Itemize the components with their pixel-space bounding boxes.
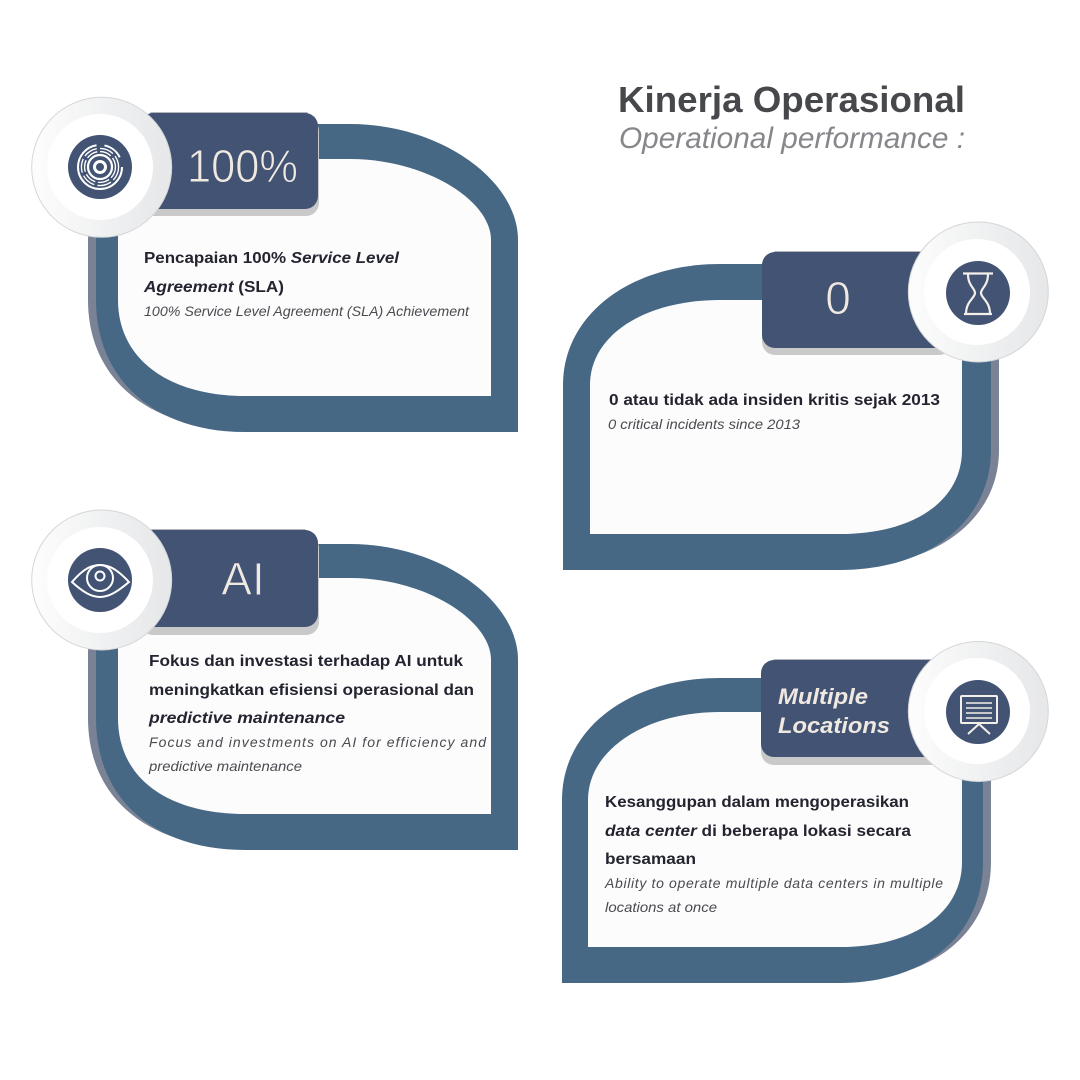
text block: AI (148, 653, 487, 774)
icon: presentation board (908, 642, 1048, 782)
text block: incidents (608, 392, 940, 432)
title: Kinerja Operasional (618, 79, 965, 120)
icon: gear wheel (32, 97, 172, 237)
text block: incidents: 0 atau tidak ada insiden kritis sejak 2013 (609, 392, 940, 409)
panel: 100% SLA (32, 97, 518, 432)
text block: AI: Fokus dan investasi terhadap AI untuk (149, 653, 463, 670)
text block: locations: Kesanggupan dalam mengoperasikan (605, 794, 909, 811)
text block: SLA: Agreement (SLA) (143, 279, 284, 296)
badge: 0: 0 (825, 272, 851, 324)
badge: 100% (140, 112, 319, 216)
badge: AI: AI (221, 553, 265, 605)
text block: locations: bersamaan (605, 851, 696, 868)
badge: 100%: 100% (187, 140, 298, 192)
panel: Multiple Locations (562, 642, 1048, 983)
icon: eye (32, 510, 172, 650)
icon: hourglass (908, 222, 1048, 362)
text block: incidents: 0 critical incidents since 2013 (608, 416, 800, 432)
text block: SLA: 100% Service Level Agreement (SLA) Achievement (144, 303, 470, 319)
badge: Multiple Locations: Multiple (778, 684, 868, 709)
text block: locations (604, 794, 943, 915)
badge: 0 (762, 251, 952, 355)
title (618, 79, 965, 155)
text block: locations: locations at once (605, 899, 717, 915)
text block: locations: Ability to operate multiple data centers in multiple (604, 875, 943, 891)
text block: AI: meningkatkan efisiensi operasional dan (149, 682, 474, 699)
text block: AI: predictive maintenance (148, 758, 302, 774)
text block: SLA: Pencapaian 100% Service Level (144, 250, 400, 267)
panel: 0 incidents (563, 222, 1048, 570)
text block: AI: Focus and investments on AI for efficiency and (149, 734, 487, 750)
text block: AI: predictive maintenance (148, 710, 345, 727)
text block: locations: data center di beberapa lokasi secara (605, 823, 911, 840)
badge: Multiple Locations: Locations (778, 713, 890, 738)
title: Operational performance : (619, 122, 965, 155)
text block: SLA (143, 250, 470, 319)
badge: AI (140, 529, 319, 635)
panel: AI (32, 510, 518, 850)
badge: Multiple Locations (761, 659, 951, 765)
